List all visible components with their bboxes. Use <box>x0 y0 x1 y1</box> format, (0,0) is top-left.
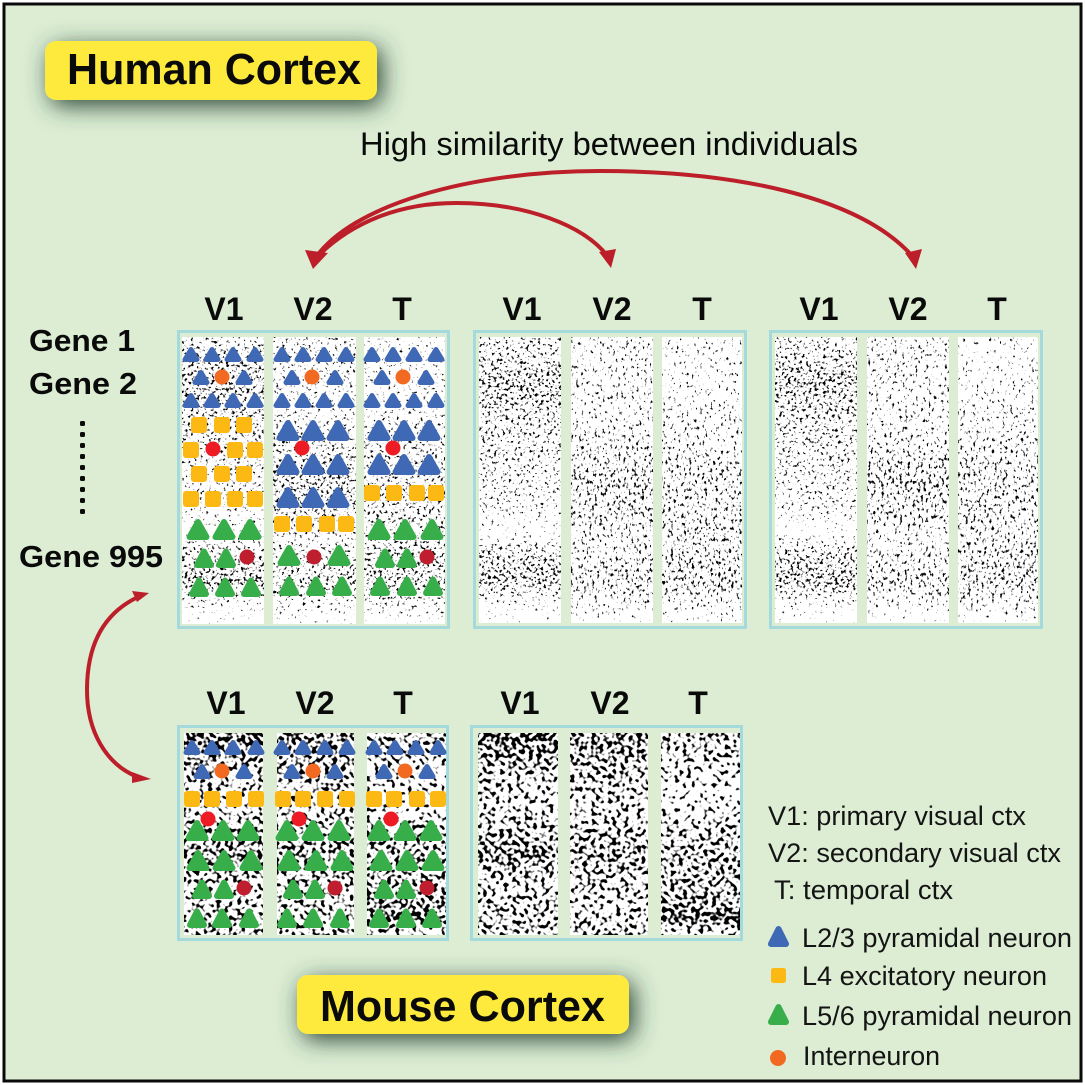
title: Mouse Cortex: Mouse Cortex <box>320 982 606 1031</box>
arrows: similarity between individuals <box>305 171 922 269</box>
mouse column headers: T <box>688 685 708 721</box>
legend: region abbreviations: V2: secondary visual ctx <box>768 838 1061 868</box>
human column headers: V1 <box>502 291 542 327</box>
mouse column headers <box>206 685 708 721</box>
legend: neuron types: L2/3 pyramidal neuron <box>802 923 1072 953</box>
dotted ellipsis between genes <box>80 421 85 514</box>
legend: neuron types: L4 excitatory neuron <box>802 961 1047 991</box>
human column headers: T <box>692 291 712 327</box>
gene labels: Gene 2 <box>29 366 137 401</box>
strip: mouse V2 annotated <box>275 733 355 935</box>
legend: neuron types: Interneuron <box>803 1041 940 1071</box>
gene labels <box>19 323 163 574</box>
strip: human T annotated <box>364 337 445 624</box>
mouse column headers: V2 <box>295 685 335 721</box>
human column headers: V2 <box>888 291 928 327</box>
legend: region abbreviations <box>768 801 1061 905</box>
mouse column headers: V1 <box>500 685 540 721</box>
panel: human individual 3 expression <box>770 332 1042 628</box>
strip: human V2 annotated <box>273 337 356 624</box>
panel: human individual 2 expression <box>474 332 746 628</box>
title: Human Cortex: Human Cortex <box>67 45 362 94</box>
arrow: human and mouse comparison <box>87 591 151 783</box>
human column headers: T <box>392 291 412 327</box>
human column headers: V2 <box>293 291 333 327</box>
legend: region abbreviations: V1: primary visual ctx <box>768 801 1026 831</box>
legend: region abbreviations: T: temporal ctx <box>774 875 953 905</box>
gene labels: Gene 1 <box>29 323 135 358</box>
strip: mouse T annotated <box>366 733 446 935</box>
panel: mouse with neurons <box>178 726 448 940</box>
mouse column headers: V2 <box>590 685 630 721</box>
legend: neuron types: L5/6 pyramidal neuron <box>802 1001 1072 1031</box>
gene labels: Gene 995 <box>19 539 163 574</box>
human column headers: V1 <box>799 291 839 327</box>
panel: mouse expression <box>472 726 742 940</box>
mouse column headers: V1 <box>206 685 246 721</box>
strip: mouse V1 annotated <box>184 733 264 935</box>
human column headers: V2 <box>592 291 632 327</box>
legend: neuron types <box>770 923 1072 1071</box>
human column headers: T <box>987 291 1007 327</box>
mouse column headers: T <box>393 685 413 721</box>
human column headers <box>204 291 1007 327</box>
heading: high similarity: High similarity between individuals <box>360 126 858 162</box>
panel: human individual 1 with neurons <box>178 332 448 628</box>
strip: human V1 annotated <box>182 337 264 624</box>
human column headers: V1 <box>204 291 244 327</box>
